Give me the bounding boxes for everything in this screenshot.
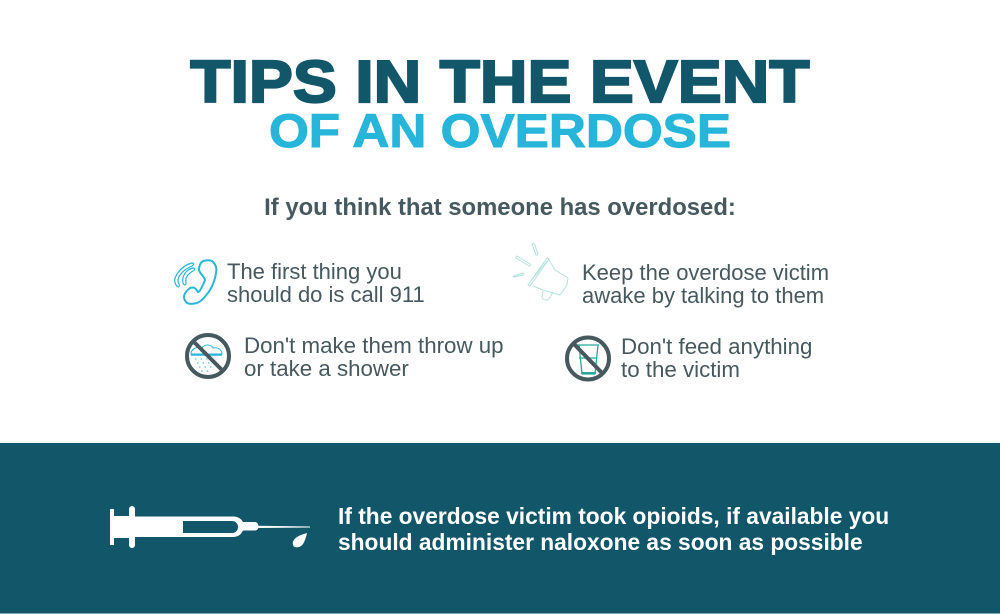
tip: call 911 <box>227 259 425 307</box>
icon: no food or drink <box>565 336 611 382</box>
title line 1: TIPS IN THE EVENT <box>190 49 810 115</box>
title line 2: OF AN OVERDOSE <box>269 104 731 157</box>
icon: syringe <box>110 506 310 548</box>
tip: no feeding: to the victim <box>621 357 740 382</box>
icon: telephone <box>174 259 218 305</box>
tip: keep awake: Keep the overdose victim <box>582 260 829 285</box>
tip: no throwing up or shower <box>244 333 504 381</box>
tip: no throwing up or shower: or take a shower <box>244 356 409 381</box>
tip: call 911: should do is call 911 <box>227 282 425 307</box>
panel: naloxone banner <box>0 443 1000 614</box>
tip: no feeding <box>621 334 812 382</box>
icon: megaphone <box>512 243 568 300</box>
tip: no feeding: Don't feed anything <box>621 334 812 359</box>
naloxone text: If the overdose victim took opioids, if available you <box>338 503 889 529</box>
subheading: If you think that someone has overdosed: <box>264 194 736 221</box>
naloxone text <box>338 503 889 555</box>
tip: keep awake: awake by talking to them <box>582 283 824 308</box>
icon: no shower <box>185 333 231 379</box>
tip: call 911: The first thing you <box>227 259 402 284</box>
naloxone text: should administer naloxone as soon as possible <box>338 529 863 555</box>
tip: no throwing up or shower: Don't make them throw up <box>244 333 504 358</box>
tip: keep awake <box>582 260 829 308</box>
